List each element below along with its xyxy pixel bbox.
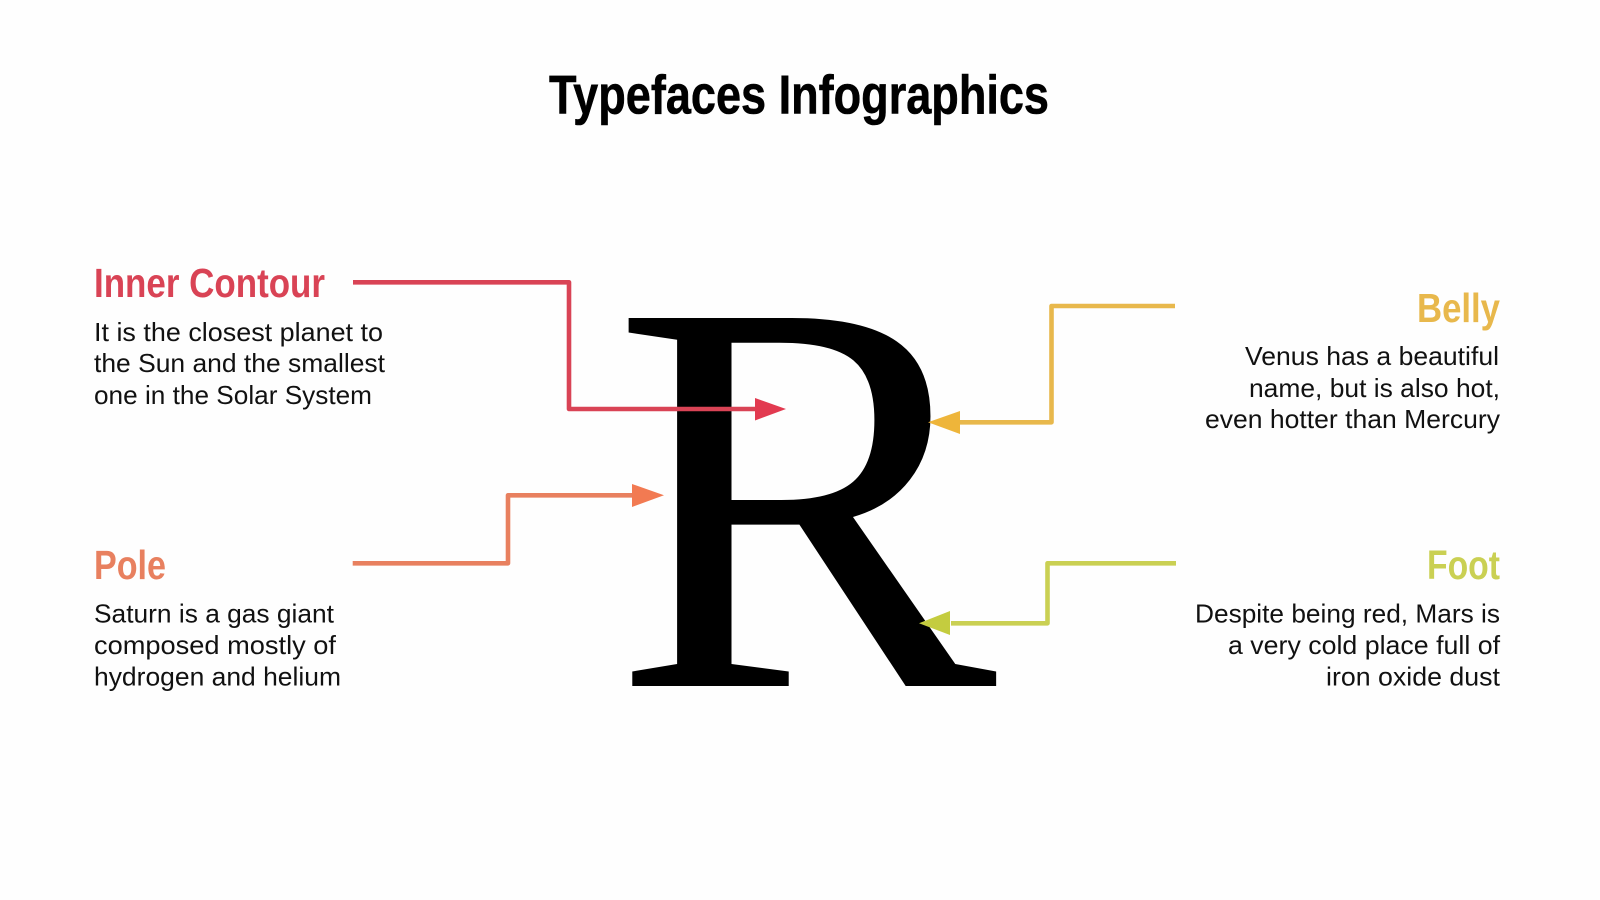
heading: pole: Pole — [94, 542, 166, 588]
text block: inner contour: It is the closest planet to — [94, 317, 383, 347]
text block: foot: a very cold place full of — [1228, 630, 1501, 660]
panel: foot — [919, 542, 1501, 692]
text block: foot: iron oxide dust — [1326, 662, 1501, 692]
text block: pole: hydrogen and helium — [94, 662, 341, 692]
text block: inner contour: one in the Solar System — [94, 380, 372, 410]
text block: belly: even hotter than Mercury — [1205, 404, 1500, 434]
arrow: pole — [353, 484, 664, 563]
text block: belly — [1205, 341, 1500, 434]
panel: belly — [928, 285, 1500, 434]
arrow: belly — [928, 306, 1175, 434]
title: Typefaces Infographics — [549, 64, 1049, 126]
text block: pole: Saturn is a gas giant — [94, 599, 335, 629]
panel: pole — [94, 484, 664, 692]
letter R diagram: R — [612, 185, 1000, 808]
heading: inner contour: Inner Contour — [94, 260, 325, 306]
text block: pole: composed mostly of — [94, 630, 337, 660]
panel: inner contour — [94, 260, 786, 420]
text block: foot — [1195, 599, 1501, 692]
text block: foot: Despite being red, Mars is — [1195, 599, 1500, 629]
arrow: inner contour — [353, 282, 786, 420]
heading: belly: Belly — [1417, 285, 1500, 331]
heading: foot: Foot — [1427, 542, 1500, 588]
text block: pole — [94, 599, 341, 692]
text block: inner contour — [94, 317, 386, 410]
arrow: foot — [919, 563, 1176, 635]
text block: belly: name, but is also hot, — [1249, 373, 1500, 403]
text block: inner contour: the Sun and the smallest — [94, 348, 386, 378]
text block: belly: Venus has a beautiful — [1245, 341, 1499, 371]
